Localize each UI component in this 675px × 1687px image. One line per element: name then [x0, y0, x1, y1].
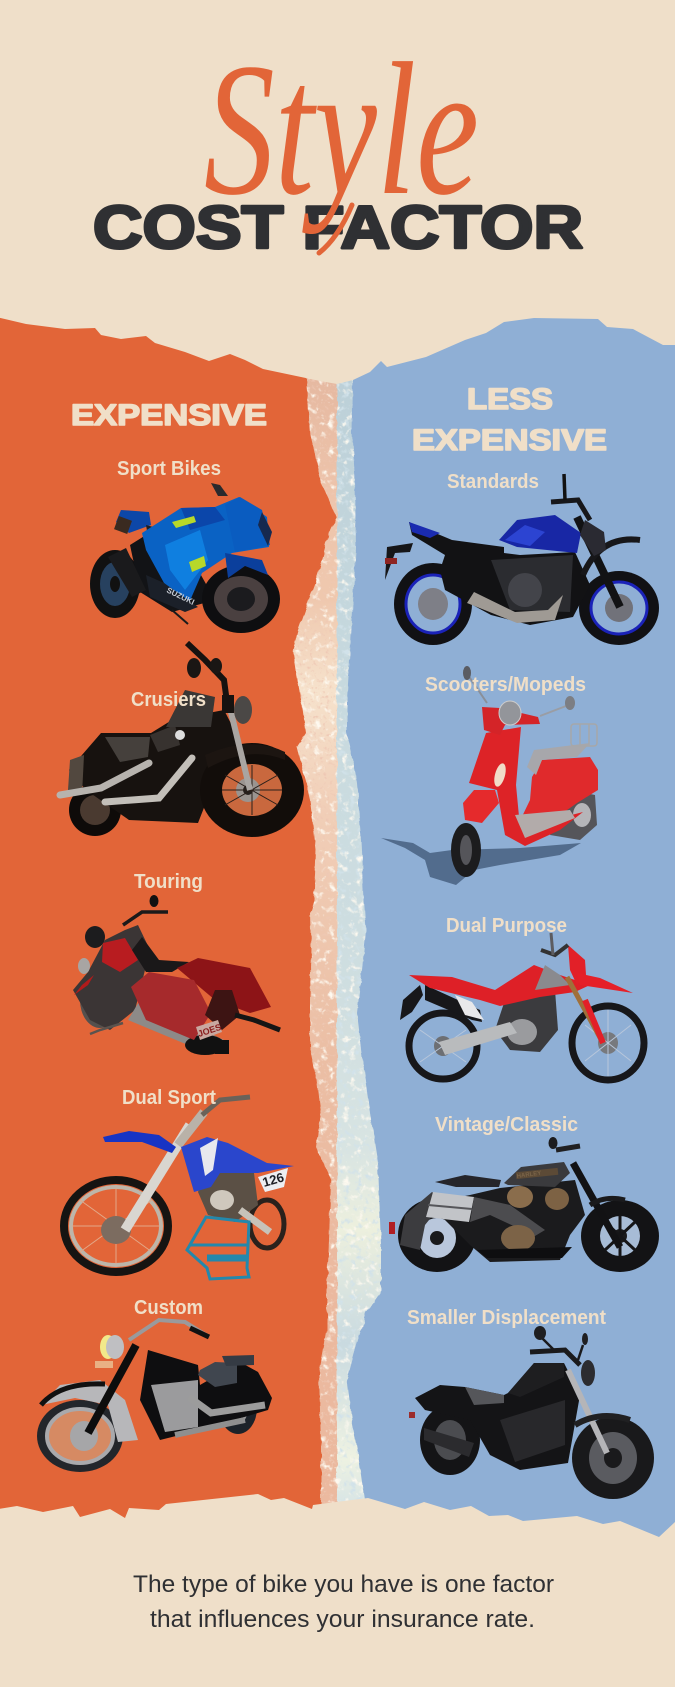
panel: less expensive column	[337, 300, 675, 1540]
bike: dual purpose	[400, 933, 644, 1080]
bike: cruiser	[60, 643, 304, 837]
bike: dual sport	[64, 1097, 294, 1279]
title: cost factor: COST FACTOR	[93, 194, 583, 261]
label: smaller displacement: Smaller Displacement	[407, 1307, 606, 1329]
footer text: that influences your insurance rate.	[150, 1606, 535, 1633]
heading: less expensive: LESS	[467, 383, 553, 416]
bike: scooter with shadow	[381, 666, 598, 885]
title: y swash crossing cost factor	[319, 205, 352, 253]
label: scooters mopeds: Scooters/Mopeds	[425, 674, 586, 696]
label: sport bikes: Sport Bikes	[117, 458, 221, 480]
footer text: The type of bike you have is one factor	[133, 1571, 554, 1598]
panel: expensive column	[0, 300, 340, 1540]
heading: less expensive	[412, 383, 607, 457]
label: dual sport: Dual Sport	[122, 1087, 216, 1109]
bike: vintage classic: HARLEY	[516, 1171, 542, 1180]
label: custom: Custom	[134, 1297, 203, 1319]
label: touring: Touring	[134, 871, 203, 893]
label: vintage classic: Vintage/Classic	[435, 1114, 578, 1136]
heading: less expensive: EXPENSIVE	[412, 424, 607, 457]
bike: custom	[37, 1320, 272, 1472]
bike: dual sport: 126	[261, 1169, 286, 1190]
bike: smaller displacement	[409, 1326, 654, 1499]
torn paper bottom edge	[0, 1494, 675, 1687]
torn paper top edge	[0, 0, 675, 384]
bike: standard	[385, 474, 659, 645]
bike: vintage classic	[389, 1137, 659, 1272]
bike: touring: JOES	[197, 1022, 222, 1039]
label: dual purpose: Dual Purpose	[446, 915, 567, 937]
bike: touring	[73, 895, 280, 1055]
torn paper centre strip	[292, 378, 382, 1504]
label: crusiers: Crusiers	[131, 689, 206, 711]
title: style script: Style	[204, 25, 479, 235]
bike: sport: SUZUKI	[165, 586, 196, 607]
footer text	[133, 1571, 554, 1633]
label: standards: Standards	[447, 471, 539, 493]
thin orange edge line	[0, 0, 1, 318]
bike: sport	[90, 483, 280, 633]
heading: expensive: EXPENSIVE	[71, 399, 267, 432]
